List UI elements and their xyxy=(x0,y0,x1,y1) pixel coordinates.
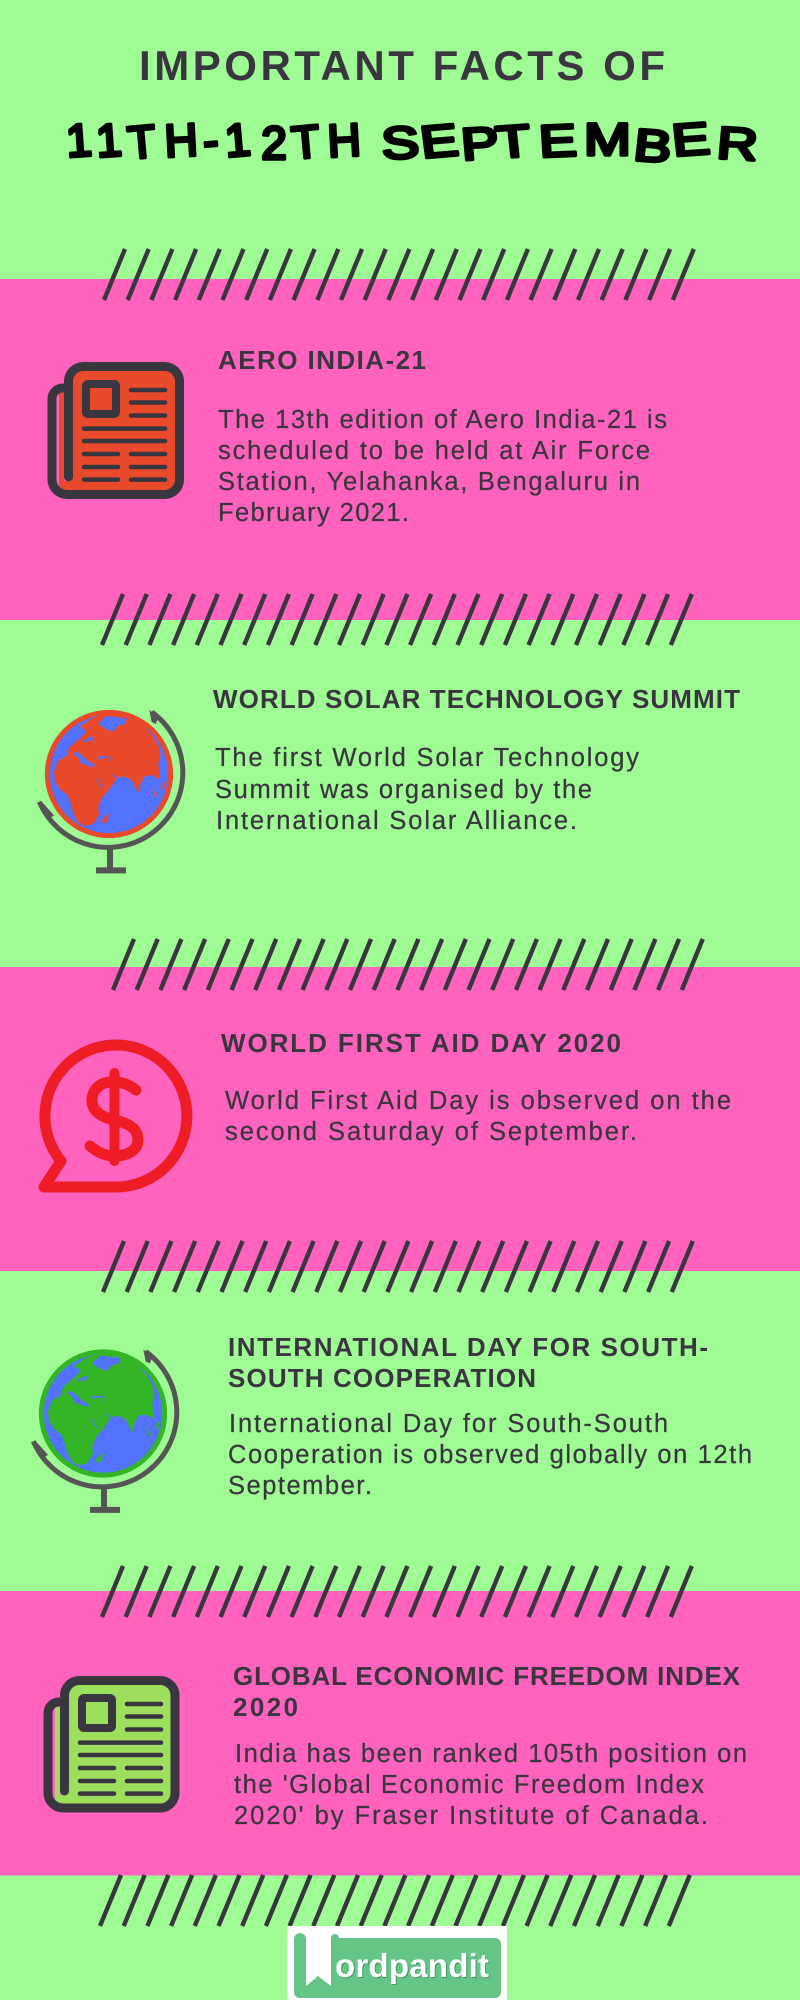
text: solar summit body: International Solar Alliance. xyxy=(216,807,577,835)
heading: south-south cooperation xyxy=(228,1332,708,1393)
heading: world first aid day: WORLD FIRST AID DAY 2020 xyxy=(221,1028,621,1058)
text: south-south body: September. xyxy=(228,1472,372,1500)
logo: wordpandit xyxy=(287,1926,507,2000)
heading: global economic freedom index xyxy=(233,1661,741,1722)
heading: world solar technology summit: WORLD SOLAR TECHNOLOGY SUMMIT xyxy=(213,684,740,714)
heading: global economic freedom index: GLOBAL ECONOMIC FREEDOM INDEX xyxy=(233,1661,741,1691)
text: aero india body xyxy=(218,406,667,527)
text: first aid body: second Saturday of September. xyxy=(225,1118,637,1146)
icon: globe orange xyxy=(37,710,183,870)
panel: global economic freedom index xyxy=(0,1591,800,1876)
text: south-south body: International Day for South-South xyxy=(229,1410,668,1438)
heading: south-south cooperation: INTERNATIONAL DAY FOR SOUTH- xyxy=(228,1332,708,1362)
text: solar summit body: Summit was organised by the xyxy=(215,776,592,804)
text: first aid body xyxy=(225,1087,731,1146)
text: aero india body: scheduled to be held at Air Force xyxy=(218,437,650,465)
panel: aero india xyxy=(0,279,800,620)
title line: dates xyxy=(64,113,760,172)
text: south-south body: Cooperation is observed globally on 12th xyxy=(228,1441,752,1469)
text: freedom index body: the 'Global Economic Freedom Index xyxy=(234,1771,704,1799)
heading: global economic freedom index: 2020 xyxy=(233,1692,298,1722)
text: freedom index body: 2020' by Fraser Institute of Canada. xyxy=(234,1802,708,1830)
text: freedom index body: India has been ranked 105th position on xyxy=(235,1740,747,1768)
text: freedom index body xyxy=(234,1740,747,1830)
title line: dates: SEPTEMBER xyxy=(380,113,760,172)
heading: south-south cooperation: SOUTH COOPERATION xyxy=(228,1363,536,1393)
title block xyxy=(64,42,760,172)
text: south-south body xyxy=(228,1410,752,1500)
text: solar summit body xyxy=(215,744,639,835)
logo wordmark: ordpandit xyxy=(335,1947,489,1984)
heading: aero india: AERO INDIA-21 xyxy=(218,345,426,375)
panel: world solar technology summit xyxy=(37,684,740,870)
text: first aid body: World First Aid Day is observed on the xyxy=(225,1087,731,1115)
text: aero india body: The 13th edition of Aero India-21 is xyxy=(218,406,667,434)
icon: globe green xyxy=(31,1349,177,1510)
icon: speech bubble with dollar xyxy=(44,1045,187,1187)
text: aero india body: Station, Yelahanka, Bengaluru in xyxy=(218,468,640,496)
icon: newspaper green xyxy=(48,1680,175,1808)
title line: important facts of: IMPORTANT FACTS OF xyxy=(139,42,665,89)
title line: dates: 11TH-12TH xyxy=(64,113,362,169)
panel: world first aid day xyxy=(0,967,800,1271)
panel: south-south cooperation xyxy=(31,1332,752,1510)
text: aero india body: February 2021. xyxy=(218,499,409,527)
icon: bookmark W xyxy=(306,1926,331,1986)
icon: newspaper orange xyxy=(52,366,180,494)
text: solar summit body: The first World Solar Technology xyxy=(215,744,639,772)
